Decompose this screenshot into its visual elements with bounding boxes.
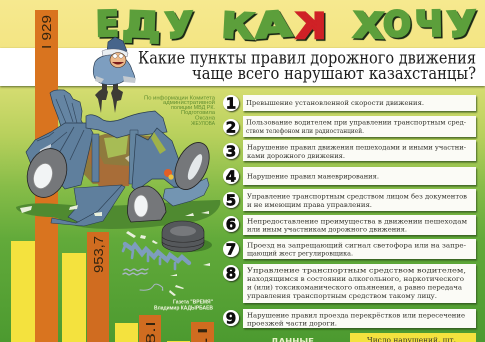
item 3 bbox=[223, 140, 476, 161]
ground shadow bbox=[16, 200, 220, 229]
car interior bbox=[80, 134, 169, 184]
item 8: и (или) токсикоманического опьянения, а равно передача bbox=[247, 284, 462, 292]
bar: yellow 3 bbox=[115, 323, 138, 342]
item 4 bbox=[223, 167, 476, 186]
icon: wrecked car bbox=[21, 90, 216, 226]
left wheel bbox=[21, 143, 73, 203]
title: О bbox=[383, 5, 411, 45]
title: Д bbox=[122, 5, 161, 46]
item 4: Нарушение правил маневрирования. bbox=[247, 172, 379, 180]
item 5: Управление транспортным средством лицом без документов bbox=[247, 192, 467, 200]
item 5: и не имеющим права управления. bbox=[247, 201, 372, 209]
bottom wheel bbox=[127, 186, 166, 222]
item 6 bbox=[223, 215, 476, 235]
upper right wheel bbox=[168, 137, 216, 195]
bar: yellow 4 bbox=[167, 341, 190, 342]
credit: newspaper: Газета "ВРЕМЯ" bbox=[173, 300, 213, 306]
item 8 bbox=[223, 264, 476, 303]
item 8: находящимся в состоянии алкогольного, наркотического bbox=[247, 275, 464, 283]
legend box bbox=[350, 333, 476, 342]
title: К bbox=[296, 7, 326, 47]
item 8: Управление транспортным средством водителем, bbox=[247, 266, 466, 274]
item 9: проезжей части дороги. bbox=[247, 320, 337, 328]
value: 953,7: 953,7 bbox=[91, 236, 106, 273]
credit: source: По информации Комитета bbox=[144, 96, 215, 102]
credit: source: административной bbox=[163, 99, 215, 106]
bar: orange 4 bbox=[191, 322, 214, 342]
title: Х bbox=[353, 6, 384, 47]
value: 1929: I 929 bbox=[39, 15, 54, 49]
item 8: управления транспортным средством такому лицу. bbox=[247, 292, 437, 300]
item 6: или иным участникам дорожного движения. bbox=[247, 226, 407, 234]
item 5 bbox=[223, 189, 476, 211]
item 7: Проезд на запрещающий сигнал светофора или на запре- bbox=[247, 242, 466, 250]
bar: orange 1 bbox=[35, 10, 58, 342]
bar: orange 2 bbox=[87, 232, 109, 342]
rear body bbox=[132, 128, 189, 191]
title: А bbox=[254, 5, 293, 47]
bar: yellow 1 bbox=[11, 241, 35, 342]
credit: source: Оксана bbox=[195, 116, 215, 122]
title: К bbox=[221, 6, 255, 48]
item 2: Пользование водителем при управлении транспортным сред- bbox=[246, 118, 466, 126]
item 3: Нарушение правил движения пешеходами и иными участни- bbox=[247, 144, 466, 152]
item 4: 4 bbox=[226, 168, 236, 186]
white question band bbox=[0, 48, 485, 86]
credit: source bbox=[144, 96, 215, 127]
bar chart bbox=[11, 10, 214, 342]
credit: source: полиции МВД РК. bbox=[171, 105, 215, 111]
list of violations bbox=[223, 94, 476, 328]
item 3: 3 bbox=[226, 142, 236, 160]
item 6: Непредоставление преимущества в движении пешеходам bbox=[247, 218, 467, 226]
bar: orange 3 bbox=[139, 315, 161, 342]
item 9: 9 bbox=[226, 310, 236, 328]
credit: source: Подготовила bbox=[181, 110, 215, 116]
credit: newspaper bbox=[154, 300, 213, 312]
crumpled hood bbox=[50, 90, 84, 145]
credit: source: ЖЕУЛОВА bbox=[191, 121, 215, 127]
item 2: ством телефоном или радиостанцией. bbox=[246, 127, 364, 135]
rear bumper bbox=[163, 178, 209, 206]
title: У bbox=[446, 5, 477, 46]
item 9 bbox=[223, 309, 476, 328]
item 1: 1 bbox=[226, 94, 236, 112]
front mass bbox=[26, 123, 93, 189]
title: Е bbox=[95, 5, 119, 45]
lower sill bbox=[51, 185, 125, 226]
title: Ч bbox=[414, 5, 443, 45]
item 2 bbox=[223, 116, 476, 137]
credit: newspaper: Владимир КАДЫРБАЕВ bbox=[154, 306, 213, 312]
item 7: 7 bbox=[226, 240, 236, 258]
item 5: 5 bbox=[226, 192, 236, 210]
debris on ground bbox=[20, 205, 210, 296]
roof and pillars bbox=[86, 111, 167, 138]
title bbox=[95, 5, 477, 48]
item 1: Превышение установленной скорости движения. bbox=[246, 99, 424, 107]
item 8: 8 bbox=[226, 264, 236, 282]
question heading bbox=[138, 48, 476, 83]
icon: policeman cartoon bbox=[93, 37, 136, 113]
item 9: Нарушение правил проезда перекрёстков или пересечение bbox=[247, 312, 465, 320]
item 2: 2 bbox=[226, 118, 236, 136]
item 6: 6 bbox=[226, 216, 236, 234]
item 3: ками дорожного движения. bbox=[247, 152, 345, 160]
item 1 bbox=[223, 94, 476, 112]
item 7 bbox=[223, 239, 476, 259]
title: У bbox=[164, 6, 194, 47]
bar: yellow 2 bbox=[62, 253, 86, 342]
icon: broken spring bbox=[123, 244, 189, 290]
icon: loose tire bbox=[162, 221, 212, 252]
colored debris bbox=[164, 169, 172, 177]
item 7: щающий жест регулировщика. bbox=[247, 250, 353, 258]
